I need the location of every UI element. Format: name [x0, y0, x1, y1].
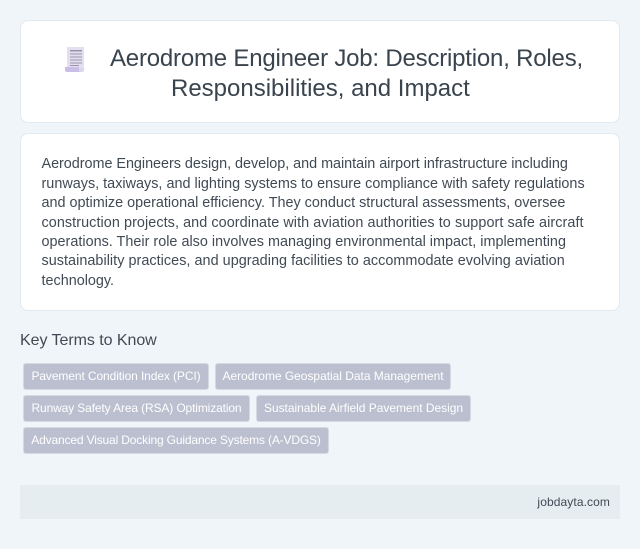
description text: construction projects, and coordinate with aviation authorities to support safe aircraft [42, 215, 584, 231]
title [110, 45, 583, 102]
description text [42, 156, 585, 289]
footer bar [20, 485, 620, 519]
description text: Aerodrome Engineers design, develop, and maintain airport infrastructure including [42, 156, 568, 172]
description text: sustainability practices, and upgrading facilities to accommodate evolving aviation [42, 253, 565, 269]
tag: A-VDGS [23, 427, 329, 454]
tag: PCI: Pavement Condition Index (PCI) [31, 369, 201, 383]
tag: RSA [23, 395, 250, 422]
footer source text: jobdayta.com [537, 495, 610, 509]
panel: title card [20, 20, 620, 123]
tag: geospatial [215, 363, 451, 390]
tag: geospatial: Aerodrome Geospatial Data Management [222, 369, 444, 383]
title: Responsibilities, and Impact [171, 75, 470, 102]
icon: document scroll [65, 47, 84, 72]
tag: A-VDGS: Advanced Visual Docking Guidance Systems (A-VDGS) [31, 433, 321, 447]
tag: pavement design [256, 395, 471, 422]
heading: key terms: Key Terms to Know [20, 332, 157, 349]
panel: description card [20, 133, 620, 311]
tag: RSA: Runway Safety Area (RSA) Optimization [32, 401, 241, 415]
description text: technology. [42, 273, 114, 289]
tag: PCI [23, 363, 209, 390]
description text: runways, taxiways, and lighting systems to ensure compliance with safety regulations [42, 176, 585, 192]
tag: pavement design: Sustainable Airfield Pavement Design [264, 401, 463, 415]
description text: and optimize operational efficiency. They conduct structural assessments, oversee [42, 195, 565, 211]
title: Aerodrome Engineer Job: Description, Roles, [110, 45, 583, 72]
description text: operations. Their role also involves managing environmental impact, implementing [42, 234, 566, 250]
tag list [23, 363, 471, 454]
